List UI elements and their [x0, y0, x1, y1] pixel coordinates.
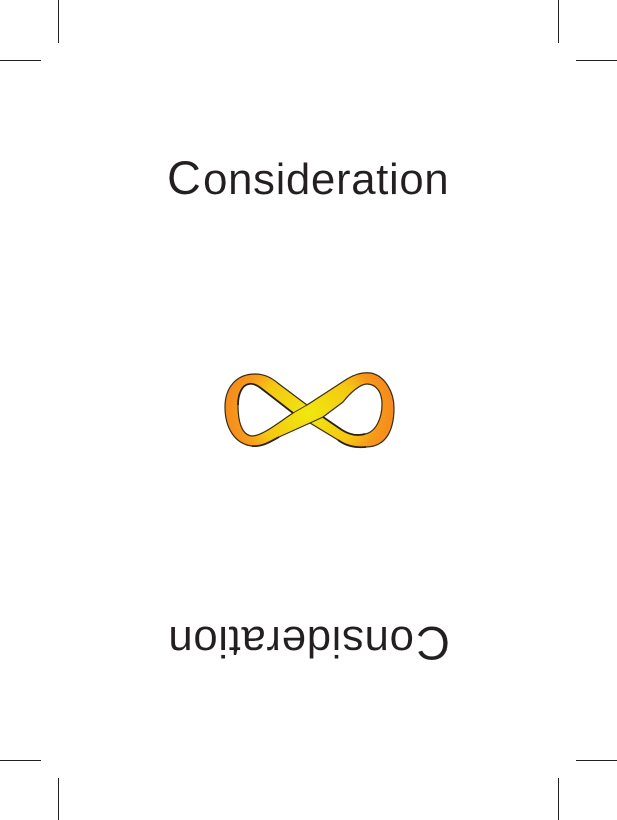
inner shadow of holes	[238, 384, 366, 447]
crossing edges	[293, 405, 323, 423]
icon: infinity ribbon	[225, 373, 394, 447]
title: Consideration: Consideration	[167, 151, 449, 204]
inverted title: Consideration: Consideration	[168, 617, 450, 670]
